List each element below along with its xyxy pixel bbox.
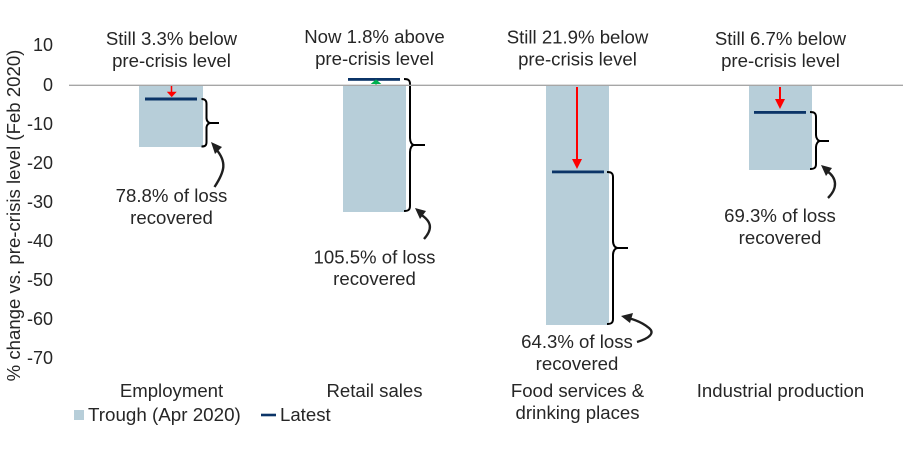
- category label: food: Food services &: [511, 380, 645, 401]
- panel: industrial production: [697, 28, 864, 401]
- callout: employment: recovered: [130, 207, 213, 228]
- panel: food services: [507, 26, 652, 423]
- y axis labels: -50: [27, 270, 53, 290]
- category label: food: drinking places: [515, 402, 640, 423]
- heading: industrial: Still 6.7% below: [715, 28, 847, 49]
- heading: retail: pre-crisis level: [315, 48, 434, 69]
- y axis labels: [27, 35, 53, 368]
- latest line: retail: [348, 78, 400, 81]
- y axis title: % change vs. pre-crisis level (Feb 2020): [3, 50, 24, 381]
- brace: employment: [202, 99, 219, 146]
- legend label: trough: Trough (Apr 2020): [88, 404, 241, 425]
- brace: food: [607, 172, 628, 324]
- callout: industrial: 69.3% of loss: [724, 205, 836, 226]
- heading: industrial: pre-crisis level: [721, 50, 840, 71]
- curved arrow: employment: [211, 142, 223, 187]
- brace: industrial: [810, 112, 829, 169]
- heading: employment: pre-crisis level: [112, 50, 231, 71]
- legend swatch: latest: [261, 414, 276, 416]
- panel: employment: [106, 28, 238, 401]
- legend: [74, 404, 331, 425]
- arrow: food decline: [572, 87, 582, 169]
- brace: retail: [404, 79, 425, 211]
- y axis labels: -60: [27, 309, 53, 329]
- callout: retail: 105.5% of loss: [314, 246, 435, 268]
- curved arrow: retail: [415, 208, 430, 239]
- y axis labels: 0: [43, 75, 53, 95]
- latest line: food: [552, 170, 604, 173]
- y axis labels: -70: [27, 348, 53, 368]
- heading: food: Still 21.9% below: [507, 26, 649, 48]
- trough bar: employment: [139, 85, 203, 147]
- arrow: employment decline: [168, 85, 175, 96]
- curved arrow: food: [621, 313, 652, 342]
- category label: industrial: Industrial production: [697, 380, 864, 401]
- callout: retail: recovered: [333, 268, 416, 289]
- trough bar: food: [546, 85, 609, 325]
- panel: retail sales: [304, 26, 445, 401]
- heading: employment: Still 3.3% below: [106, 28, 238, 49]
- heading: food: pre-crisis level: [518, 48, 637, 70]
- arrow: retail rise: [372, 80, 380, 85]
- callout: industrial: recovered: [739, 227, 821, 248]
- trough bar: industrial: [749, 85, 812, 170]
- curved arrow: industrial: [821, 165, 835, 198]
- heading: retail: Now 1.8% above: [304, 26, 445, 47]
- callout: food: 64.3% of loss: [521, 331, 633, 352]
- latest line: employment: [145, 98, 197, 100]
- y axis labels: -30: [27, 192, 53, 212]
- legend swatch: trough: [74, 410, 84, 420]
- zero axis line: [69, 84, 903, 86]
- legend label: latest: Latest: [280, 404, 331, 425]
- category label: retail: Retail sales: [326, 380, 423, 401]
- arrow: industrial decline: [775, 87, 785, 109]
- y axis labels: 10: [33, 35, 53, 55]
- y axis labels: -40: [27, 231, 53, 251]
- category label: employment: Employment: [120, 380, 224, 401]
- latest line: industrial: [754, 111, 806, 114]
- callout: employment: 78.8% of loss: [116, 185, 227, 206]
- y axis labels: -20: [27, 153, 53, 173]
- callout: food: recovered: [536, 353, 618, 374]
- y axis labels: -10: [27, 114, 53, 134]
- trough bar: retail: [343, 85, 406, 212]
